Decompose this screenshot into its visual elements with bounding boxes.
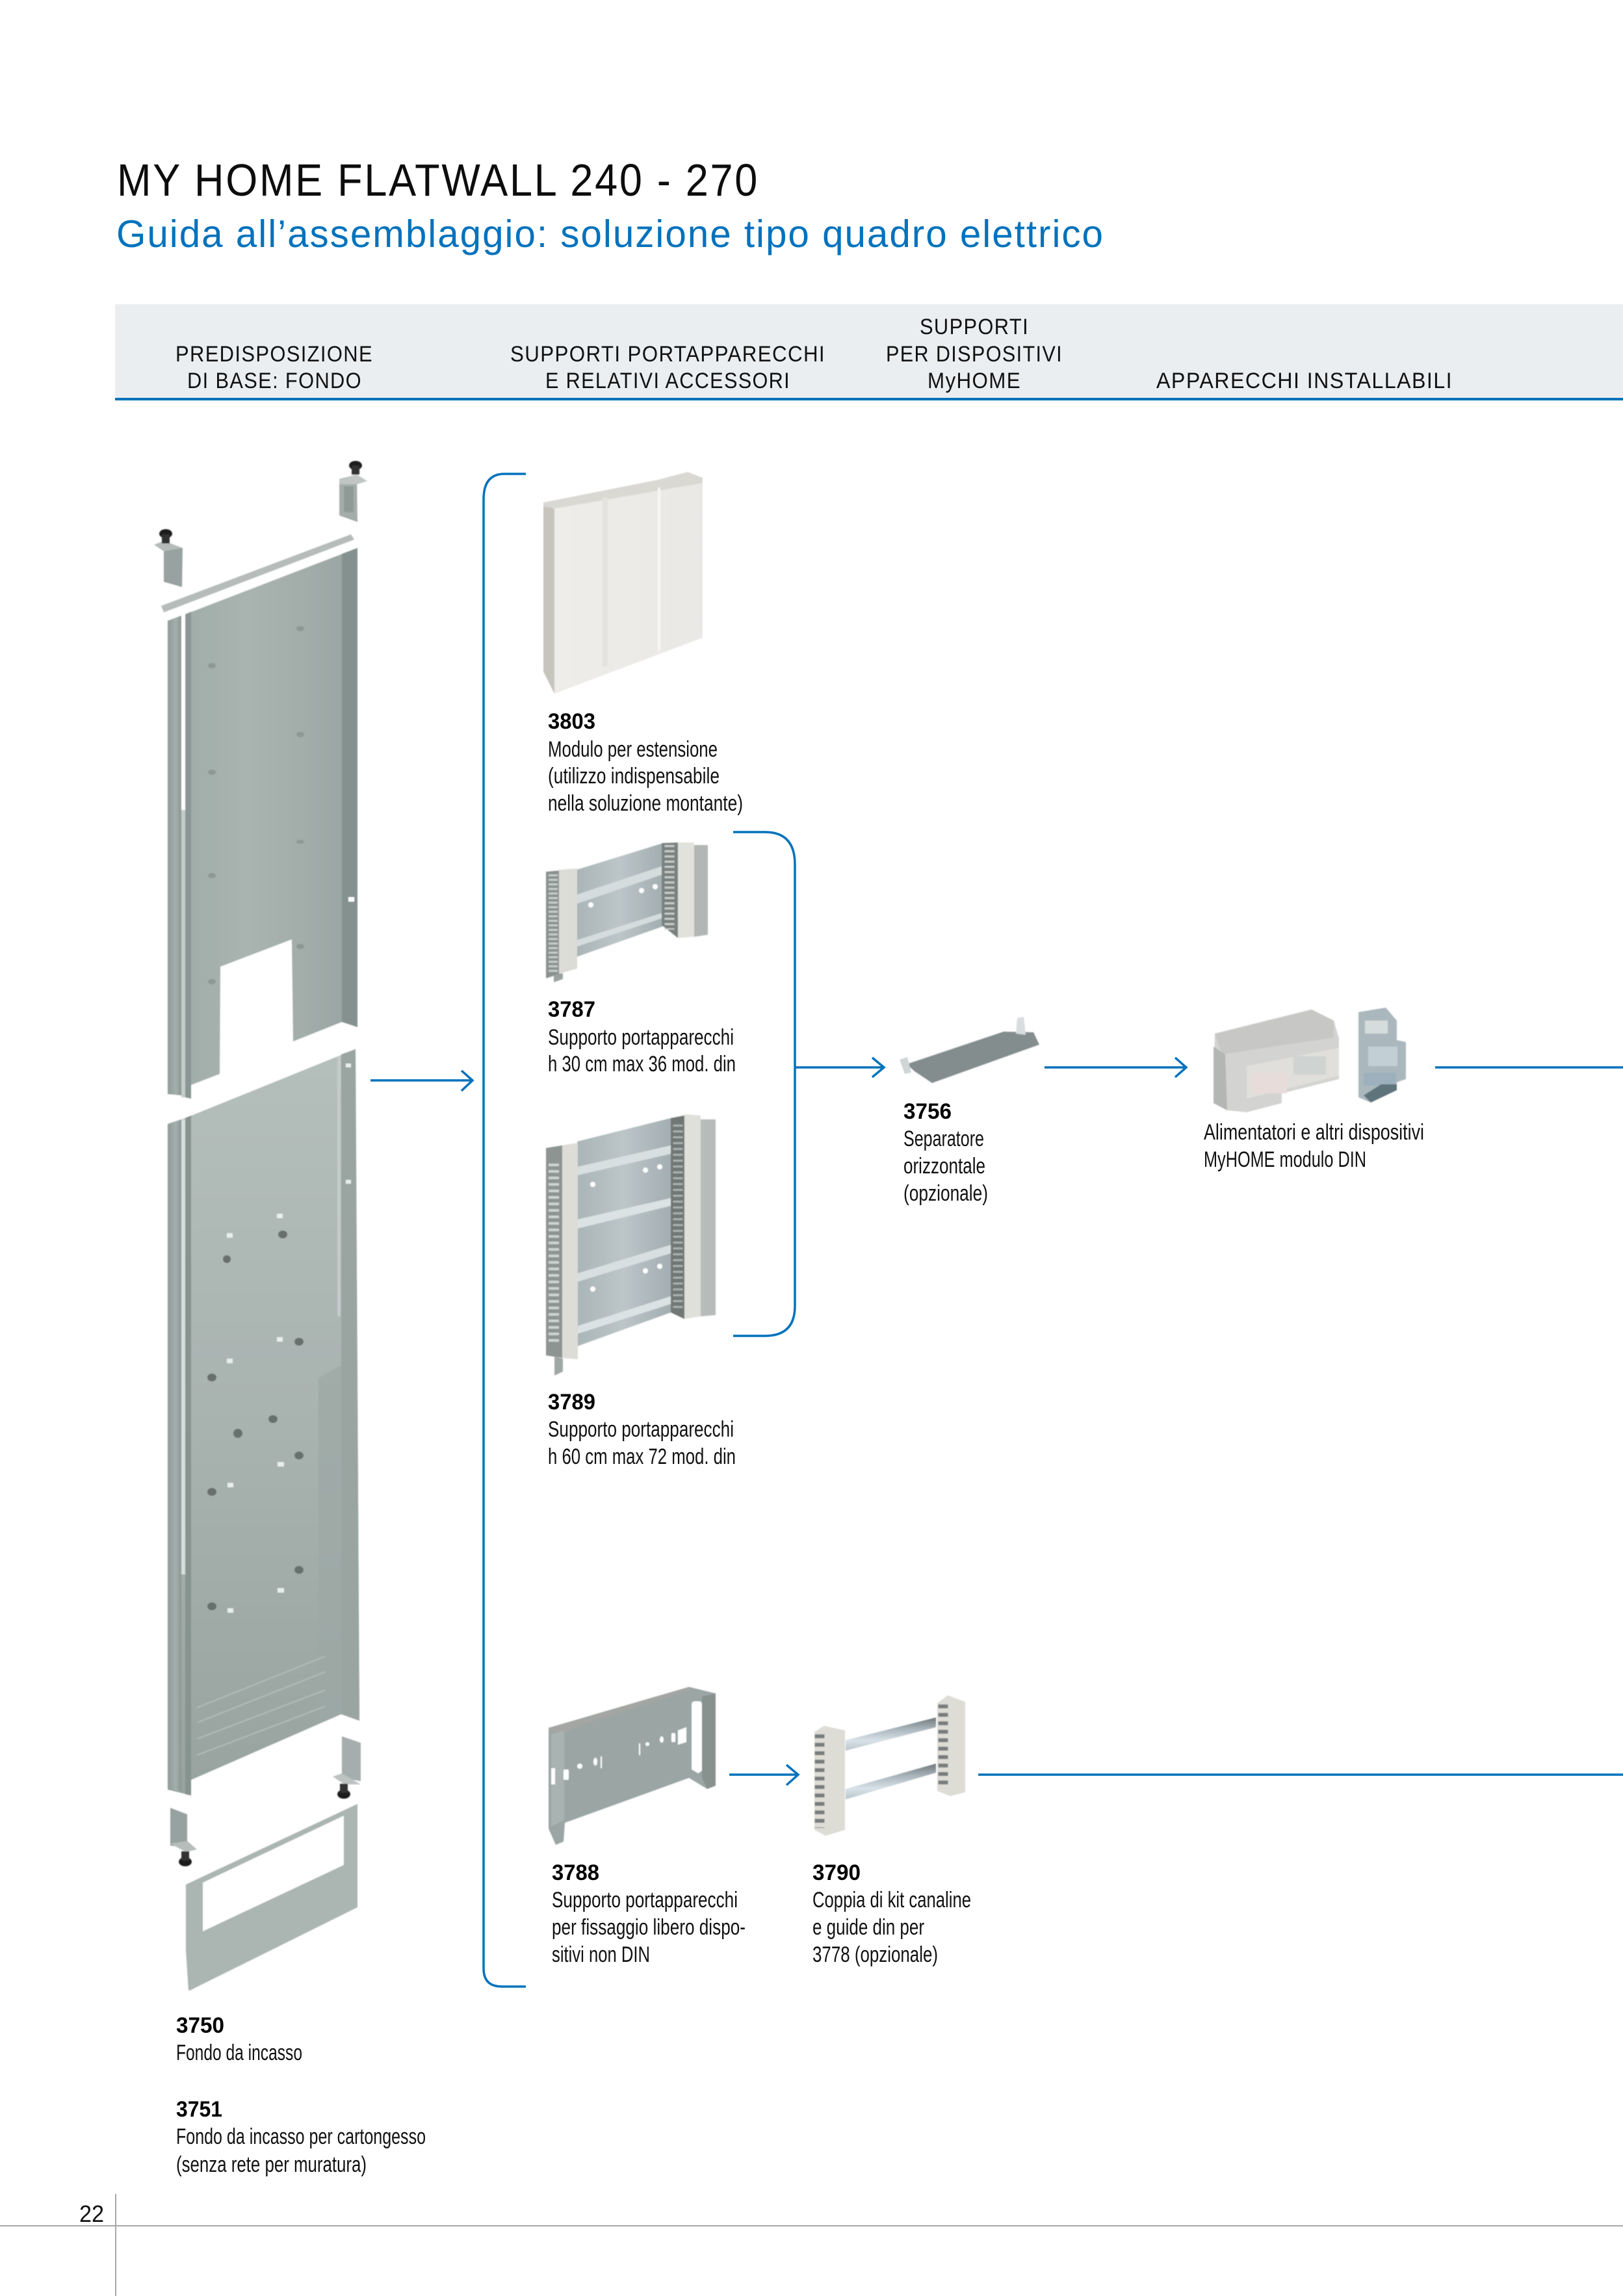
caption: 3787: 3787 [548, 997, 595, 1022]
column heading: predisposizione di base: DI BASE: FONDO [187, 369, 362, 393]
caption: 3788: per fissaggio libero dispo- [552, 1915, 746, 1940]
arrow: 3788 to 3790 [729, 1765, 798, 1785]
upper back panel [168, 548, 357, 1099]
title: MY HOME FLATWALL 240 - 270 [117, 155, 759, 205]
top left bracket [154, 529, 183, 587]
top right bracket [339, 461, 367, 522]
column heading: supporti per dispositivi MyHOME: MyHOME [928, 369, 1021, 393]
subtitle: Guida all’assemblaggio: soluzione tipo quadro elettrico [116, 213, 1104, 255]
connector line: devices to right edge [1435, 1066, 1623, 1069]
bottom left bracket [170, 1808, 197, 1866]
caption: 3803: 3803 [548, 709, 595, 734]
caption: 3803: Modulo per estensione [548, 737, 718, 762]
caption: 3790: e guide din per [812, 1915, 924, 1940]
din module [1358, 1008, 1406, 1102]
caption: 3750 and 3751: 3751 [176, 2097, 222, 2122]
caption: 3790: 3790 [812, 1860, 861, 1885]
column heading: supporti per dispositivi MyHOME: PER DISPOSITIVI [886, 342, 1063, 367]
column heading: supporti per dispositivi MyHOME: SUPPORTI [920, 315, 1029, 339]
caption: 3756: (opzionale) [903, 1181, 988, 1206]
footer rule [0, 2225, 1623, 2226]
caption: 3756: Separatore [903, 1127, 984, 1151]
caption: 3787: Supporto portapparecchi [548, 1025, 734, 1050]
column heading: predisposizione di base [175, 342, 373, 393]
caption: devices: MyHOME modulo DIN [1204, 1147, 1366, 1172]
lower back panel [168, 1049, 359, 1795]
caption: 3750 and 3751: Fondo da incasso [176, 2041, 302, 2065]
right bracket with arrow to separator [733, 832, 884, 1336]
caption: 3750 and 3751: Fondo da incasso per cartongesso [176, 2124, 426, 2149]
column heading: supporti per dispositivi MyHOME [886, 315, 1063, 393]
bottom right bracket [333, 1736, 361, 1799]
caption: 3756 [903, 1099, 988, 1206]
caption: 3803 [548, 709, 743, 816]
left bracket grouping supports [484, 474, 526, 1987]
caption: 3788: sitivi non DIN [552, 1942, 650, 1967]
caption: 3788 [552, 1860, 746, 1967]
caption: 3790 [812, 1860, 971, 1967]
product image: 3789 support [546, 1114, 716, 1376]
caption: 3789: h 60 cm max 72 mod. din [548, 1444, 736, 1469]
column heading: supporti portapparecchi: E RELATIVI ACCESSORI [545, 369, 790, 393]
bottom frame [186, 1804, 357, 1990]
product image: fondo da incasso exploded view [154, 461, 367, 1990]
caption: 3789: Supporto portapparecchi [548, 1417, 734, 1442]
footer vertical rule [115, 2194, 116, 2296]
caption: 3790: Coppia di kit canaline [812, 1888, 971, 1912]
caption: 3756: orizzontale [903, 1154, 985, 1179]
product image: 3787 support [546, 842, 708, 982]
product image: 3788 support [549, 1687, 716, 1845]
caption: 3788: 3788 [552, 1860, 599, 1885]
caption: 3790: 3778 (opzionale) [812, 1942, 938, 1967]
caption: 3803: nella soluzione montante) [548, 791, 743, 816]
caption: 3750 and 3751: (senza rete per muratura) [176, 2152, 367, 2177]
caption: 3787: h 30 cm max 36 mod. din [548, 1052, 736, 1076]
product image: 3803 extension module [543, 472, 703, 694]
caption: 3788: Supporto portapparecchi [552, 1888, 738, 1912]
caption: 3750 and 3751: 3750 [176, 2013, 224, 2038]
column heading: supporti portapparecchi [510, 342, 825, 393]
caption: 3803: (utilizzo indispensabile [548, 764, 720, 789]
header band [115, 304, 1623, 400]
connector line: 3790 to right edge [978, 1773, 1623, 1776]
page number: 22 [79, 2200, 104, 2227]
column heading: predisposizione di base: PREDISPOSIZIONE [175, 342, 373, 367]
column heading: apparecchi installabili: APPARECCHI INSTALLABILI [1156, 369, 1453, 393]
caption: 3750 and 3751 [176, 2013, 426, 2177]
product image: 3756 separator [900, 1017, 1039, 1083]
arrow: separator to devices [1045, 1058, 1186, 1077]
caption: devices: Alimentatori e altri dispositivi [1204, 1120, 1424, 1145]
product image: MyHOME DIN devices [1214, 1008, 1406, 1112]
top strip [161, 534, 354, 612]
arrow: fondo to supports [370, 1071, 473, 1091]
caption: 3789: 3789 [548, 1390, 595, 1415]
caption: devices [1204, 1120, 1424, 1172]
power supply module [1214, 1010, 1339, 1112]
caption: 3787 [548, 997, 736, 1076]
product image: 3790 canaline kit [814, 1695, 965, 1836]
caption: 3789 [548, 1390, 736, 1469]
caption: 3756: 3756 [903, 1099, 952, 1124]
column heading: supporti portapparecchi: SUPPORTI PORTAPPARECCHI [510, 342, 825, 367]
